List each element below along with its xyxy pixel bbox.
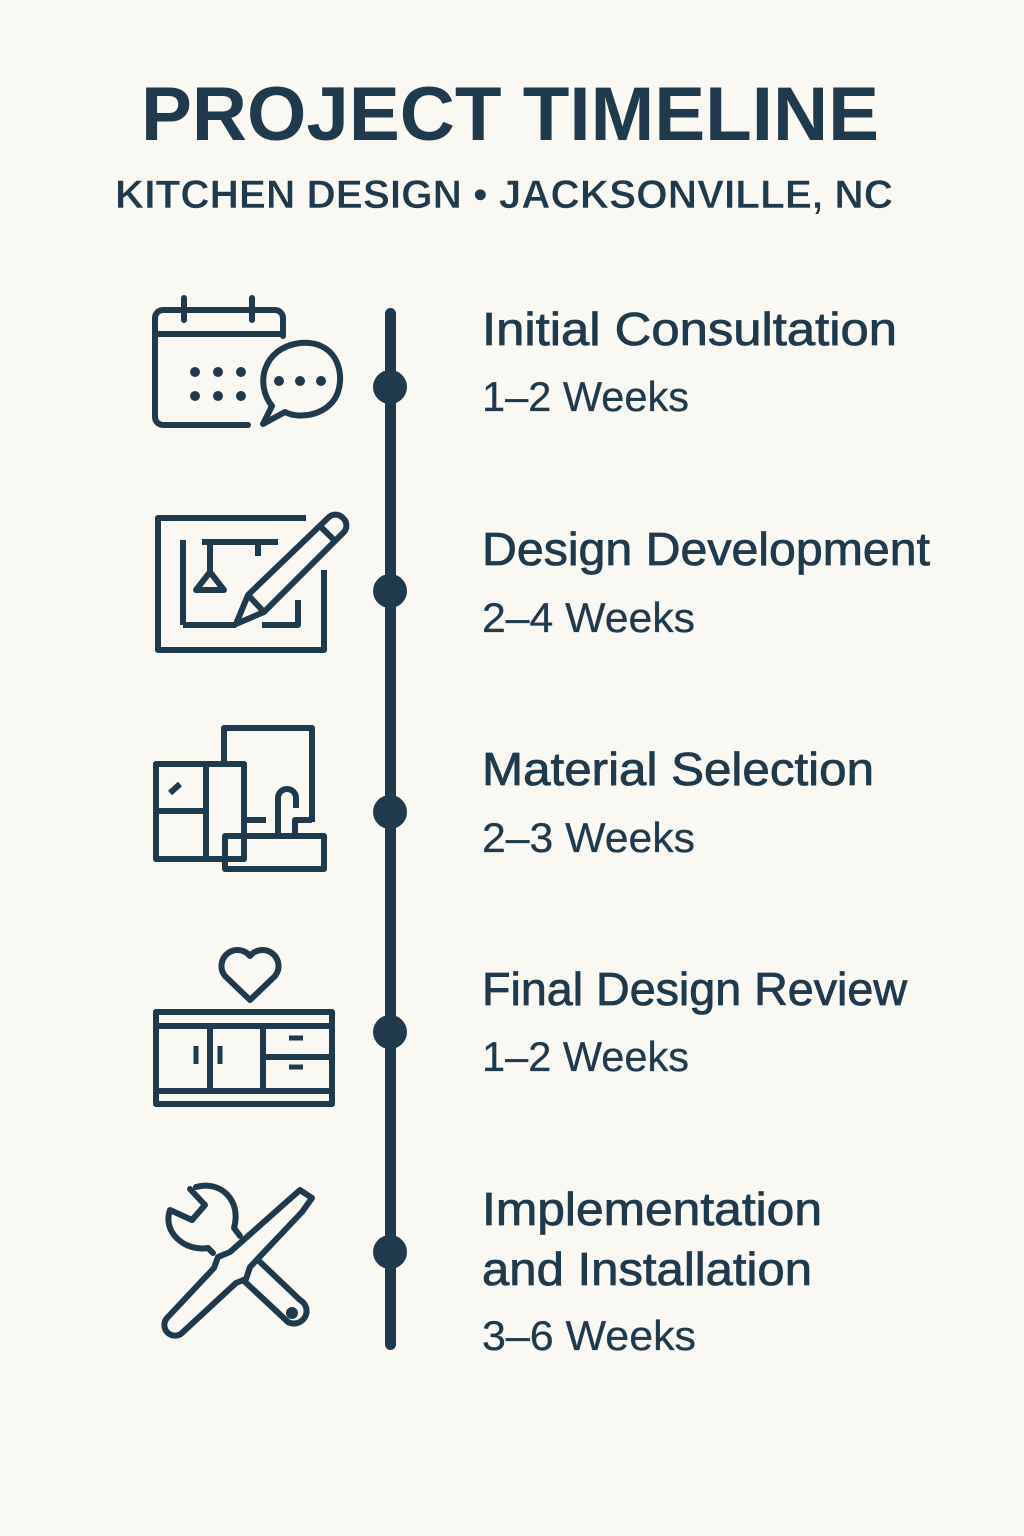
step 4 text: Final Design Review [482,963,908,1015]
icon: wrench and screwdriver [164,1186,312,1336]
icon: materials (fridge, cabinet, sink) [156,728,324,869]
icon: blueprint with pencil [158,515,346,650]
step 5 text: Implementation [482,1183,822,1235]
step 4 text: 1–2 Weeks [482,1033,689,1080]
step 5 text [482,1183,822,1359]
step 2 text: 2–4 Weeks [482,594,695,641]
step 2 text [482,523,930,641]
icon: calendar with chat bubble [155,298,340,425]
step 3 text: Material Selection [482,743,874,795]
step 4 text [482,963,908,1080]
step 5 text: and Installation [482,1243,812,1295]
step 3 text: 2–3 Weeks [482,814,695,861]
subtitle: KITCHEN DESIGN • JACKSONVILLE, NC [115,173,893,217]
step 3 text [482,743,874,861]
step 2 text: Design Development [482,523,930,575]
step 5 text: 3–6 Weeks [482,1312,696,1359]
timeline line with dots [373,308,407,1350]
icon: cabinet with heart [156,950,332,1104]
step 1 text: Initial Consultation [482,303,897,355]
step 1 text: 1–2 Weeks [482,373,689,420]
title: PROJECT TIMELINE [141,72,879,157]
step 1 text [482,303,897,420]
